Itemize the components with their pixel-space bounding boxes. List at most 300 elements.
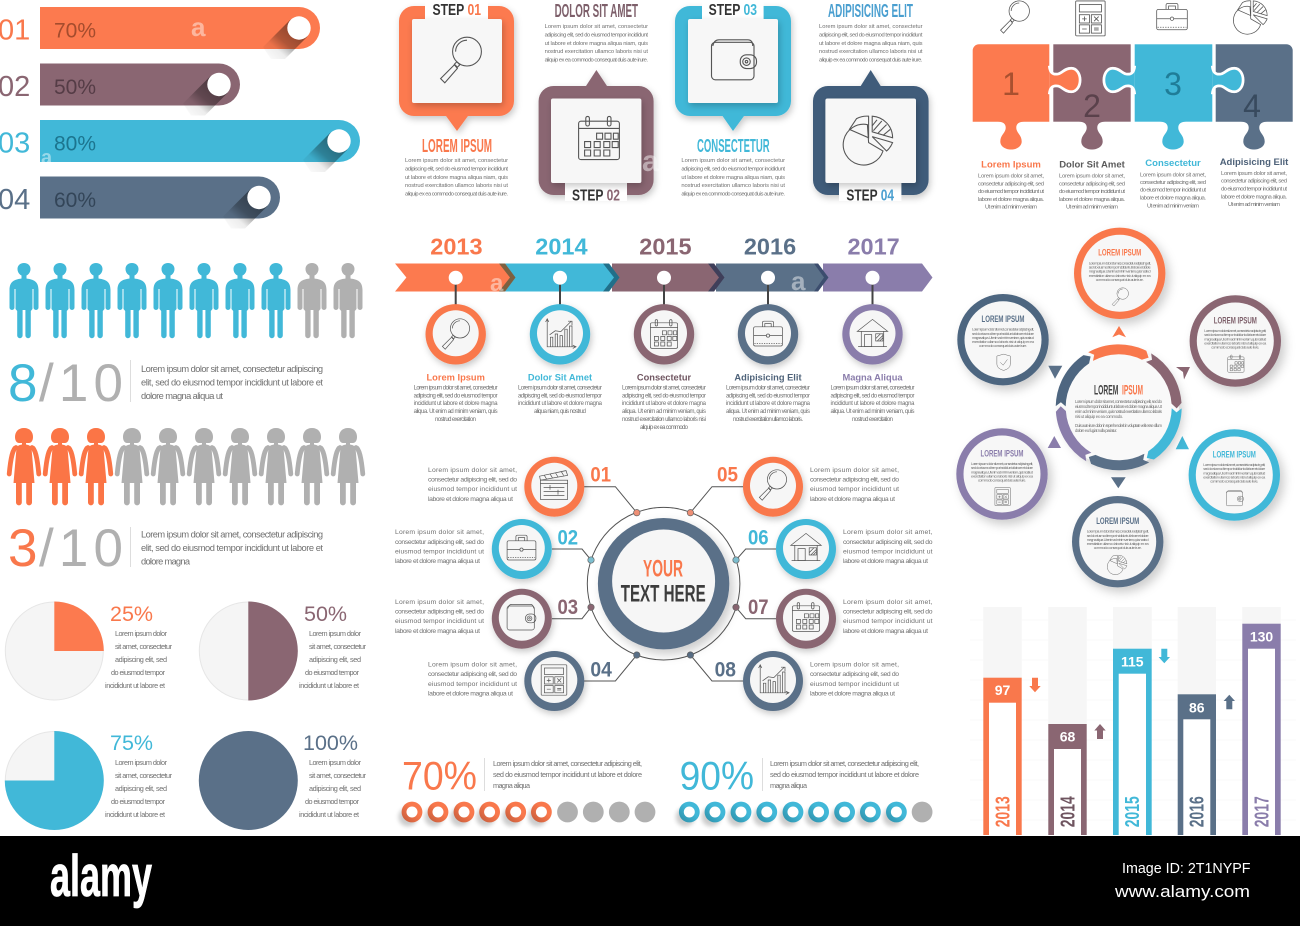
- item 02: [395, 519, 578, 579]
- timeline node 2015: nostrud exercitation ullamco laboris nisi: [622, 417, 706, 423]
- pie 25%: sit amet, consectetur: [115, 642, 173, 651]
- pie 75%: [5, 731, 173, 830]
- statistic 3/10: Lorem ipsum dolor sit amet, consectetur adipiscing: [141, 530, 323, 540]
- bar 2013: 2013: [992, 796, 1014, 827]
- step 02: Lorem ipsum dolor sit amet, consectetur: [545, 24, 648, 30]
- timeline node 2013: aliqua. Ut enim ad minim veniam, quis: [414, 409, 498, 415]
- puzzle text 4: labore et dolore magna aliqua.: [1221, 194, 1287, 200]
- item 01: [428, 457, 611, 517]
- item 06: [748, 519, 933, 579]
- connector lines: [552, 487, 776, 681]
- item 05: Lorem ipsum dolor sit amet,: [810, 467, 899, 474]
- description: [762, 758, 919, 791]
- puzzle text 3: consectetur adipiscing elit, sed: [1140, 180, 1206, 186]
- timeline years: 2016: [744, 233, 796, 259]
- timeline node 2013: incididunt ut labore et dolore magna: [414, 401, 498, 407]
- circle left top slate: exercitation ullamco laboris nisi ut aliquip ex ea: [972, 339, 1035, 344]
- step 04: adipiscing elit, sed do eiusmod tempor incididunt: [819, 32, 923, 38]
- pie 75%: Lorem ipsum dolor: [115, 758, 168, 767]
- timeline node 2017: [830, 271, 915, 423]
- arrow up 2014: [1094, 724, 1106, 739]
- step 01: nostrud exercitation ullamco laboris nisi ut: [405, 183, 508, 189]
- timeline node 2017: Lorem ipsum dolor sit amet, consectetur: [830, 386, 914, 392]
- puzzle text 3: Lorem ipsum dolor sit amet,: [1140, 172, 1206, 178]
- pie 25%: Lorem ipsum dolor: [115, 629, 168, 638]
- item 08: eiusmod tempor incididunt ut: [810, 681, 899, 688]
- item 07: Lorem ipsum dolor sit amet,: [843, 599, 933, 606]
- figures grey: [117, 428, 363, 505]
- item 06: Lorem ipsum dolor sit amet,: [843, 529, 933, 536]
- pie 100%: Lorem ipsum dolor: [309, 758, 362, 767]
- step 02: nostrud exercitation ullamco laboris nisi ut: [545, 49, 648, 55]
- timeline node 2013: adipiscing elit, sed do eiusmod tempor: [414, 393, 498, 399]
- circle left top slate: [957, 294, 1049, 385]
- puzzle numbers: 4: [1243, 88, 1261, 124]
- timeline node 2015: [622, 271, 707, 431]
- item 08: [715, 651, 899, 711]
- item 06: labore et dolore magna aliqua ut: [843, 558, 928, 565]
- item 01: consectetur adipiscing elit, sed do: [428, 476, 517, 484]
- timeline node 2017: incididunt ut labore et dolore magna: [830, 401, 915, 407]
- item 05: [717, 457, 899, 517]
- panel: percentage bars: [0, 7, 360, 228]
- circle bottom slate: magna aliqua. Ut enim ad minim veniam, quis nostrud: [1087, 537, 1149, 542]
- timeline node 2017: Magna Aliqua: [842, 372, 903, 382]
- pie 50%: adipiscing elit, sed: [309, 655, 361, 664]
- pie 100%: incididunt ut labore et: [299, 810, 359, 819]
- timeline node 2016: Adipisicing Elit: [734, 372, 802, 382]
- central text: dolore eu fugiat nulla pariatur.: [1075, 428, 1117, 433]
- item 04: eiusmod tempor incididunt ut: [428, 681, 517, 688]
- circle right top mauve: LOREM IPSUM: [1214, 315, 1257, 326]
- item 05: labore et dolore magna aliqua ut: [810, 496, 895, 503]
- puzzle pieces: [973, 44, 1293, 149]
- step 04: ut labore et dolore magna aliqua niam, quis: [819, 41, 923, 47]
- item 04: 04: [590, 659, 612, 682]
- item 08: labore et dolore magna aliqua ut: [810, 690, 895, 698]
- bar 01 70%: [0, 7, 320, 59]
- pie 50%: 50%: [304, 602, 347, 626]
- circle left bottom purple: magna aliqua. Ut enim ad minim veniam, quis nostrud: [971, 469, 1033, 474]
- circle top orange: sed do eiusmod tempor incididunt ut labore et dolore: [1089, 264, 1151, 269]
- item 03: consectetur adipiscing elit, sed do: [395, 608, 484, 616]
- circle bottom slate: sed do eiusmod tempor incididunt ut labore et dolore: [1087, 533, 1149, 538]
- puzzle numbers: 2: [1083, 88, 1101, 124]
- step 03: CONSECTETUR: [697, 136, 770, 156]
- circle left bottom purple: exercitation ullamco laboris nisi ut aliquip ex ea: [971, 474, 1034, 478]
- circle right bottom blue: sed do eiusmod tempor incididunt ut labore et dolore: [1203, 466, 1265, 471]
- statistic 8/10: /10: [39, 354, 123, 413]
- pie 100%: 100%: [303, 731, 358, 755]
- step 02: [539, 1, 654, 205]
- circle right bottom blue: Lorem ipsum dolor sit amet, consectetur adipiscing elit,: [1203, 462, 1266, 467]
- step 02: DOLOR SIT AMET: [555, 1, 638, 21]
- pie 25%: do eiusmod tempor: [111, 668, 166, 677]
- step 03: aliquip ex ea commodo consequat duis aute irure.: [681, 192, 785, 198]
- step 04: [813, 1, 929, 205]
- bar 2016: 2016: [1187, 796, 1209, 827]
- arrow down 2013: [1029, 678, 1041, 692]
- step 01: adipiscing elit, sed do eiusmod tempor incididunt: [405, 166, 508, 172]
- puzzle text 2: Dolor Sit Amet: [1059, 160, 1126, 170]
- description: sed do eiusmod tempor incididunt ut labore et dolore: [770, 770, 919, 779]
- item 02: labore et dolore magna aliqua ut: [395, 558, 480, 565]
- puzzle numbers: 1: [1002, 66, 1020, 102]
- circle right bottom blue: exercitation ullamco laboris nisi ut aliquip ex ea: [1203, 474, 1266, 480]
- circle left bottom purple: commodo consequat duis aute irure.: [978, 478, 1026, 482]
- circle right top mauve: magna aliqua. Ut enim ad minim veniam, quis nostrud: [1204, 336, 1266, 341]
- timeline arrow band: [395, 264, 932, 292]
- timeline node 2015: Consectetur: [637, 372, 691, 382]
- puzzle text 2: [1059, 160, 1126, 211]
- circle left bottom purple: sed do eiusmod tempor incididunt ut labore et dolore: [971, 465, 1033, 470]
- statistic 8/10: elit, sed do eiusmod tempor incididunt ut labore et: [141, 378, 323, 388]
- timeline node 2014: incididunt ut labore et dolore magna: [518, 401, 603, 407]
- item 05: consectetur adipiscing elit, sed do: [810, 476, 899, 484]
- pie 100%: [199, 731, 367, 830]
- description: magna aliqua: [770, 781, 808, 790]
- arrow down 2015: [1159, 649, 1170, 663]
- step 03: adipiscing elit, sed do eiusmod tempor incididunt: [681, 166, 785, 172]
- timeline node 2014: Lorem ipsum dolor sit amet, consectetur: [518, 386, 602, 392]
- central text: nisi ut aliquip ex ea commodo.: [1075, 414, 1123, 419]
- timeline node 2015: incididunt ut labore et dolore magna: [622, 401, 707, 407]
- central text: Duis aute irure dolor in reprehenderit in voluptate velit esse cillum: [1075, 423, 1162, 428]
- puzzle numbers: [1002, 66, 1261, 124]
- timeline node 2015: adipiscing elit, sed do eiusmod tempor: [622, 393, 706, 399]
- pie 25%: incididunt ut labore et: [105, 681, 165, 690]
- timeline node 2015: aliqua. Ut enim ad minim veniam, quis: [622, 409, 706, 415]
- timeline node 2013: nostrud exercitation: [435, 417, 476, 423]
- bar 03 80%: [0, 120, 360, 172]
- statistic 3/10: elit, sed do eiusmod tempor incididunt ut labore et: [141, 543, 323, 553]
- puzzle text 4: Adipisicing Elit: [1220, 157, 1289, 168]
- circle top orange: exercitation ullamco laboris nisi ut aliquip ex ea: [1089, 273, 1152, 278]
- timeline node 2016: adipiscing elit, sed do eiusmod tempor: [726, 393, 810, 399]
- circle right top mauve: sed do eiusmod tempor incididunt ut labore et dolore: [1204, 332, 1266, 337]
- timeline node 2016: Lorem ipsum dolor sit amet, consectetur: [726, 386, 810, 392]
- stock watermark: a: [642, 145, 659, 178]
- step 04: aliquip ex ea commodo consequat duis aute irure.: [819, 57, 923, 63]
- description: sed do eiusmod tempor incididunt ut labore et dolore: [493, 770, 642, 779]
- step 01: ut labore et dolore magna aliqua niam, quis: [405, 175, 508, 181]
- circle right top mauve: [1190, 295, 1281, 387]
- bar 2014: 2014: [1057, 796, 1079, 827]
- pie 75%: 75%: [110, 731, 153, 755]
- item 01: Lorem ipsum dolor sit amet,: [428, 467, 517, 474]
- timeline years: 2013: [430, 233, 483, 259]
- step 04: ADIPISICING ELIT: [828, 1, 913, 21]
- big value: 70%: [402, 754, 477, 798]
- circle left top slate: Lorem ipsum dolor sit amet, consectetur adipiscing elit,: [972, 327, 1034, 332]
- puzzle text 2: do eiusmod tempor incididunt ut: [1059, 189, 1125, 195]
- bar 2017: [1242, 624, 1281, 835]
- item 05: eiusmod tempor incididunt ut: [810, 486, 899, 493]
- panel: male pictogram row: [10, 263, 362, 338]
- item 06: eiusmod tempor incididunt ut: [843, 548, 933, 556]
- timeline node 2014: adipiscing elit, sed do eiusmod tempor: [518, 393, 602, 399]
- arrow up 2016: [1224, 695, 1235, 709]
- pie 50%: incididunt ut labore et: [299, 681, 359, 690]
- item 03: [395, 589, 578, 649]
- timeline years: 2015: [639, 233, 692, 259]
- puzzle text 1: Lorem ipsum dolor sit amet,: [978, 174, 1044, 180]
- circle top orange: LOREM IPSUM: [1098, 248, 1141, 259]
- circle right bottom blue: [1189, 429, 1280, 521]
- pie 50%: do eiusmod tempor: [305, 668, 360, 677]
- timeline node 2017: nostrud exercitation: [852, 417, 893, 423]
- statistic 8/10: Lorem ipsum dolor sit amet, consectetur adipiscing: [141, 364, 323, 374]
- puzzle text 1: [978, 160, 1044, 211]
- timeline node 2013: Lorem ipsum dolor sit amet, consectetur: [414, 386, 498, 392]
- central circle with title: TEXT HERE: [621, 581, 706, 608]
- puzzle text 1: do eiusmod tempor incididunt ut: [978, 189, 1044, 195]
- puzzle text 3: do eiusmod tempor incididunt ut: [1140, 188, 1206, 194]
- figures highlighted: [9, 428, 111, 505]
- central circle with title: [598, 518, 729, 649]
- timeline node 2013: Lorem Ipsum: [427, 372, 485, 382]
- step 04: Lorem ipsum dolor sit amet, consectetur: [819, 24, 923, 30]
- big value: 90%: [680, 754, 754, 798]
- step 03: STEP 03: [709, 2, 757, 19]
- circle right top mauve: commodo consequat duis aute irure.: [1211, 344, 1259, 350]
- step 02: adipiscing elit, sed do eiusmod tempor incididunt: [545, 32, 648, 38]
- item 01: 01: [590, 464, 611, 487]
- circle left top slate: commodo consequat duis aute irure.: [979, 343, 1027, 348]
- bar 2014: [1048, 724, 1087, 835]
- puzzle text 4: Ut enim ad minim veniam: [1228, 202, 1280, 208]
- panel: four steps: [399, 0, 929, 205]
- circle bottom slate: [1072, 496, 1163, 587]
- circle right bottom blue: magna aliqua. Ut enim ad minim veniam, quis nostrud: [1203, 470, 1265, 475]
- item 02: eiusmod tempor incididunt ut: [395, 548, 484, 556]
- pie 50%: [199, 602, 367, 700]
- pie 50%: sit amet, consectetur: [309, 642, 367, 651]
- bar 02 50%: 50%: [54, 76, 96, 99]
- step 01: Lorem ipsum dolor sit amet, consectetur: [405, 158, 508, 164]
- connector nodes: [588, 510, 739, 658]
- item 02: consectetur adipiscing elit, sed do: [395, 539, 484, 546]
- puzzle text 4: do eiusmod tempor incididunt ut: [1221, 186, 1287, 192]
- pie 25%: adipiscing elit, sed: [115, 655, 167, 664]
- timeline node 2015: Lorem ipsum dolor sit amet, consectetur: [622, 386, 706, 392]
- description: Lorem ipsum dolor sit amet, consectetur adipiscing elit,: [493, 759, 642, 768]
- step 01: aliquip ex ea commodo consequat duis aute irure.: [405, 192, 508, 198]
- puzzle text 3: labore et dolore magna aliqua.: [1140, 196, 1206, 202]
- central text: Lorem ipsum dolor sit amet, consectetur adipiscing elit, sed do: [1075, 399, 1163, 404]
- puzzle text 1: labore et dolore magna aliqua.: [978, 197, 1044, 203]
- statistic 3/10: 3: [8, 519, 37, 578]
- timeline node 2017: adipiscing elit, sed do eiusmod tempor: [830, 393, 914, 399]
- item 06: 06: [748, 526, 769, 549]
- item 07: labore et dolore magna aliqua ut: [843, 628, 928, 635]
- panel: female pictogram row: [9, 428, 363, 505]
- step 03: Lorem ipsum dolor sit amet, consectetur: [681, 158, 785, 164]
- circle right bottom blue: commodo consequat duis aute irure.: [1210, 478, 1258, 484]
- item 06: consectetur adipiscing elit, sed do: [843, 539, 933, 546]
- central text: enim ad minim veniam, quis nostrud exercitation ullamco laboris: [1075, 409, 1162, 414]
- footer url: www.alamy.com: [1114, 882, 1250, 901]
- step 02: aliquip ex ea commodo consequat duis aute irure.: [545, 57, 648, 63]
- stock watermark: a: [41, 147, 53, 169]
- step 02: ut labore et dolore magna aliqua niam, quis: [545, 41, 648, 47]
- stock watermark: a: [490, 270, 504, 297]
- pie 75%: adipiscing elit, sed: [115, 784, 167, 793]
- panel: bar chart: [970, 607, 1296, 835]
- panel: pie charts: [5, 602, 367, 830]
- pie 100%: sit amet, consectetur: [309, 771, 367, 780]
- bar 2016: [1178, 694, 1216, 835]
- timeline node 2016: [726, 271, 811, 423]
- bar 2013: [983, 678, 1022, 835]
- pie 75%: do eiusmod tempor: [111, 797, 166, 806]
- pie 100%: adipiscing elit, sed: [309, 784, 361, 793]
- timeline years: [430, 233, 900, 259]
- item 01: eiusmod tempor incididunt ut: [428, 486, 517, 493]
- central text: LOREM: [1094, 381, 1118, 397]
- bar 2015: 115: [1121, 654, 1144, 670]
- puzzle text 4: Lorem ipsum dolor sit amet,: [1221, 171, 1287, 177]
- statistic 3/10: /10: [39, 519, 123, 578]
- puzzle text 1: Ut enim ad minim veniam: [985, 205, 1037, 211]
- pie 50%: Lorem ipsum dolor: [309, 629, 362, 638]
- pie 25%: 25%: [110, 602, 153, 626]
- bar 2015: [1113, 649, 1152, 835]
- item 02: 02: [558, 526, 578, 549]
- bar 2017: 130: [1250, 629, 1273, 645]
- central cycle ring: [1049, 344, 1188, 470]
- circle bottom slate: Lorem ipsum dolor sit amet, consectetur adipiscing elit,: [1087, 529, 1149, 534]
- description: Lorem ipsum dolor sit amet, consectetur adipiscing elit,: [770, 759, 919, 768]
- puzzle text 4: consectetur adipiscing elit, sed: [1221, 179, 1287, 185]
- panel: cycle diagram: [956, 228, 1281, 587]
- circle left bottom purple: LOREM IPSUM: [980, 448, 1024, 459]
- grid lines and tracks: [970, 607, 1296, 820]
- bar 01 70%: 70%: [54, 20, 96, 42]
- circle right top mauve: exercitation ullamco laboris nisi ut aliquip ex ea: [1204, 340, 1267, 346]
- central text: [1075, 381, 1163, 433]
- panel: puzzle: [973, 1, 1293, 211]
- step 04: STEP 04: [846, 188, 894, 205]
- item 07: 07: [748, 596, 769, 619]
- puzzle icons: [1001, 1, 1267, 36]
- statistic 8/10: 8: [8, 354, 37, 413]
- circle bottom slate: commodo consequat duis aute irure.: [1094, 545, 1142, 550]
- bar 03 80%: 80%: [54, 132, 96, 156]
- step 03: nostrud exercitation ullamco laboris nisi ut: [681, 183, 785, 189]
- timeline node 2014: Dolor Sit Amet: [528, 372, 592, 382]
- puzzle text 3: [1140, 158, 1206, 209]
- item 07: [748, 589, 933, 649]
- timeline node 2014: [518, 271, 603, 415]
- pie 75%: incididunt ut labore et: [105, 810, 165, 819]
- circle bottom slate: exercitation ullamco laboris nisi ut aliquip ex ea: [1087, 541, 1150, 546]
- footer bar: [0, 836, 1300, 926]
- pie 100%: do eiusmod tempor: [305, 797, 360, 806]
- puzzle text 2: Lorem ipsum dolor sit amet,: [1059, 174, 1125, 180]
- circle right top mauve: Lorem ipsum dolor sit amet, consectetur adipiscing elit,: [1204, 328, 1267, 333]
- description: [484, 758, 642, 791]
- panel: 90 percent dots: [676, 754, 932, 826]
- dots row: [676, 802, 932, 826]
- item 03: Lorem ipsum dolor sit amet,: [395, 599, 484, 606]
- item 04: labore et dolore magna aliqua ut: [428, 690, 513, 698]
- puzzle text 3: Consectetur: [1145, 158, 1201, 169]
- central text: eiusmod tempor incididunt ut labore et dolore magna aliqua. Ut: [1075, 404, 1163, 409]
- timeline node 2015: aliquip ex ea commodo: [640, 425, 689, 431]
- puzzle text 2: labore et dolore magna aliqua.: [1059, 197, 1125, 203]
- direction triangles: [1048, 326, 1190, 488]
- step 02: STEP 02: [572, 188, 620, 205]
- puzzle text 1: consectetur adipiscing elit, sed: [978, 181, 1044, 187]
- step 01: STEP 01: [432, 2, 481, 19]
- circle top orange: commodo consequat duis aute irure.: [1096, 277, 1144, 282]
- item 07: consectetur adipiscing elit, sed do: [843, 608, 933, 616]
- circle left bottom purple: Lorem ipsum dolor sit amet, consectetur adipiscing elit,: [971, 461, 1033, 466]
- circle left bottom purple: [956, 428, 1048, 520]
- puzzle text 3: Ut enim ad minim veniam: [1147, 203, 1199, 209]
- circle top orange: Lorem ipsum dolor sit amet, consectetur adipiscing elit,: [1089, 260, 1151, 265]
- stock watermark: a: [791, 266, 806, 296]
- step 01: [399, 0, 514, 198]
- circle left top slate: LOREM IPSUM: [982, 314, 1025, 325]
- item 08: Lorem ipsum dolor sit amet,: [810, 662, 899, 668]
- puzzle text 1: Lorem Ipsum: [981, 160, 1041, 170]
- bar 04 60%: 60%: [54, 189, 96, 212]
- stock watermark: [41, 12, 806, 297]
- timeline node 2013: [414, 271, 498, 423]
- timeline node 2014: aliqua niam, quis nostrud: [534, 409, 586, 415]
- item 03: 03: [558, 596, 578, 619]
- pie 25%: [5, 602, 173, 700]
- statistic 8/10: [8, 354, 323, 413]
- pie 75%: sit amet, consectetur: [115, 771, 173, 780]
- item 03: labore et dolore magna aliqua ut: [395, 628, 480, 635]
- circle left top slate: magna aliqua. Ut enim ad minim veniam, quis nostrud: [972, 335, 1034, 340]
- item 04: consectetur adipiscing elit, sed do: [428, 671, 517, 678]
- timeline node 2017: aliqua. Ut enim ad minim veniam, quis: [830, 409, 914, 415]
- footer logo: alamy: [50, 844, 152, 909]
- step 04: nostrud exercitation ullamco laboris nisi ut: [819, 49, 923, 55]
- item 08: consectetur adipiscing elit, sed do: [810, 671, 899, 678]
- central text: IPSUM: [1122, 381, 1143, 397]
- circle left top slate: sed do eiusmod tempor incididunt ut labore et dolore: [972, 331, 1034, 336]
- item 08: 08: [715, 659, 736, 682]
- puzzle text 4: [1220, 157, 1289, 208]
- circle bottom slate: LOREM IPSUM: [1096, 516, 1139, 527]
- panel: 70 percent dots: [398, 754, 655, 826]
- circle right bottom blue: LOREM IPSUM: [1213, 449, 1256, 460]
- step 03: [675, 0, 791, 198]
- figures highlighted: [10, 263, 290, 338]
- central circle with title: YOUR: [643, 556, 683, 583]
- footer image id: Image ID: 2T1NYPF: [1122, 861, 1251, 877]
- item 03: eiusmod tempor incididunt ut: [395, 618, 484, 625]
- bar 02 50%: [0, 64, 240, 116]
- bar 2013: 97: [995, 682, 1010, 698]
- timeline node 2016: nostrud exercitation ullamco laboris.: [733, 417, 803, 423]
- panel: hub diagram: [395, 457, 933, 711]
- puzzle text 2: consectetur adipiscing elit, sed: [1059, 181, 1125, 187]
- item 01: labore et dolore magna aliqua ut: [428, 496, 513, 503]
- statistic 8/10: dolore magna aliqua ut: [141, 391, 223, 401]
- stock watermark: a: [191, 12, 206, 42]
- item 05: 05: [717, 464, 738, 487]
- item 07: eiusmod tempor incididunt ut: [843, 618, 933, 625]
- item 04: [428, 651, 612, 711]
- statistic 3/10: dolore magna: [141, 556, 191, 566]
- puzzle numbers: 3: [1164, 66, 1182, 102]
